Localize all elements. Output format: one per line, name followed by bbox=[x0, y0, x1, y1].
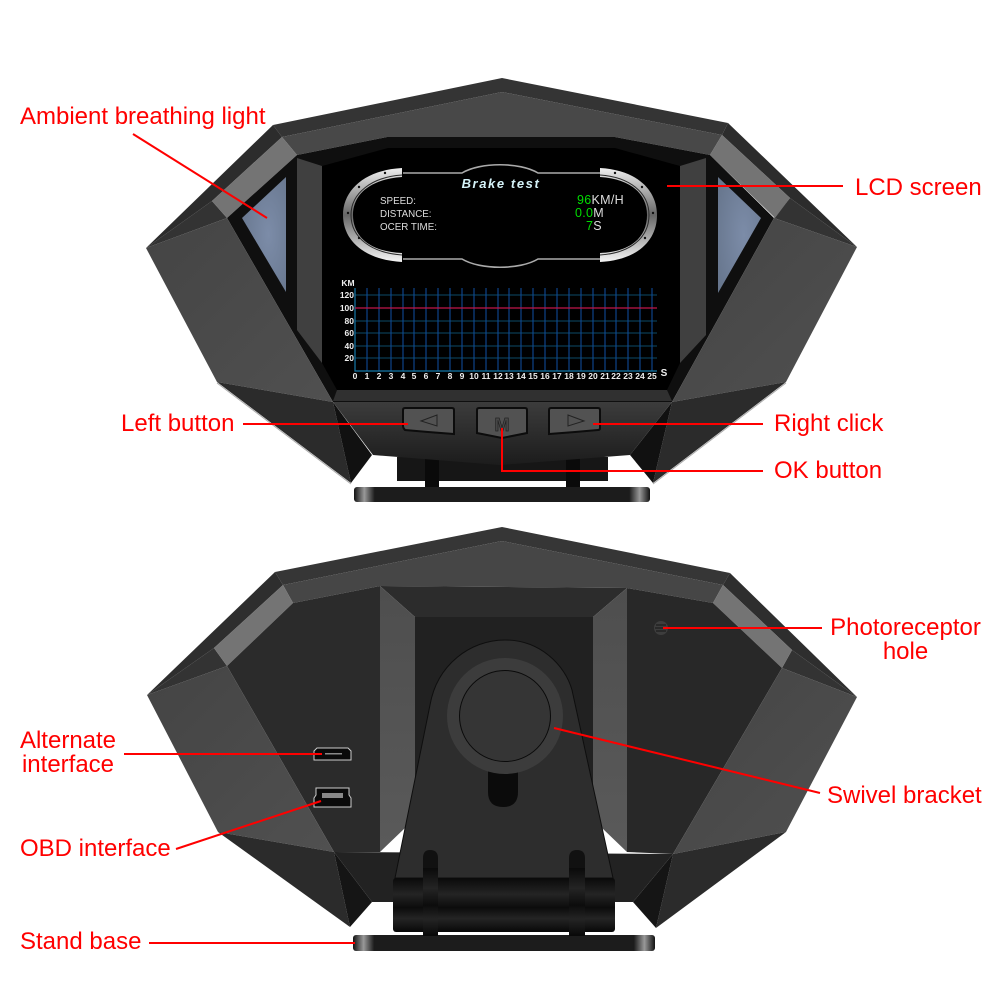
swivel ring bbox=[447, 658, 563, 774]
speed chart: 3 bbox=[389, 371, 394, 381]
ambient light left bbox=[242, 177, 286, 292]
speed chart: 5 bbox=[412, 371, 417, 381]
label: alternate interface: interface bbox=[22, 751, 114, 778]
rear view device bbox=[147, 527, 857, 951]
label: swivel bracket: Swivel bracket bbox=[827, 782, 982, 809]
speed chart: 14 bbox=[516, 371, 526, 381]
outer dark bevels bbox=[146, 123, 857, 248]
ambient light right bbox=[718, 177, 761, 293]
OK button: M bbox=[494, 415, 510, 435]
label: left button: Left button bbox=[121, 410, 234, 437]
top housing rear bbox=[275, 527, 730, 603]
speed chart: 20 bbox=[588, 371, 598, 381]
front view device bbox=[146, 78, 857, 502]
photoreceptor hole bbox=[654, 621, 668, 635]
hinge bbox=[393, 878, 615, 932]
speed chart: 16 bbox=[540, 371, 550, 381]
speed chart: 7 bbox=[436, 371, 441, 381]
label: OK button: OK button bbox=[774, 457, 882, 484]
speed chart: 23 bbox=[623, 371, 633, 381]
screen readouts: 0.0M bbox=[575, 206, 604, 220]
screen readouts: DISTANCE: bbox=[380, 209, 432, 220]
speed chart: 15 bbox=[528, 371, 538, 381]
speed chart: 80 bbox=[345, 316, 354, 326]
swivel cap bbox=[460, 670, 550, 762]
hinge strap right bbox=[569, 850, 585, 936]
button panel bbox=[333, 402, 672, 465]
right button bbox=[549, 408, 600, 434]
LCD screen bbox=[322, 148, 680, 390]
label: photoreceptor hole: Photoreceptor bbox=[830, 614, 981, 641]
speed chart: 13 bbox=[504, 371, 514, 381]
screen readouts: OCER TIME: bbox=[380, 222, 437, 233]
swivel bracket bbox=[395, 640, 613, 878]
speed chart: 17 bbox=[552, 371, 562, 381]
right side panel bbox=[672, 218, 857, 402]
label: LCD screen: LCD screen bbox=[855, 174, 982, 201]
label: photoreceptor hole: hole bbox=[883, 638, 928, 665]
speed chart: 12 bbox=[493, 371, 503, 381]
micro USB port bbox=[314, 748, 351, 760]
label: right click: Right click bbox=[774, 410, 884, 437]
speed chart: 18 bbox=[564, 371, 574, 381]
bottom screen band bbox=[333, 390, 672, 401]
speed chart: 8 bbox=[448, 371, 453, 381]
right inner panel bbox=[680, 158, 706, 363]
light bevel strips bbox=[212, 135, 790, 218]
stand base front bbox=[354, 487, 650, 502]
speed chart: 60 bbox=[345, 328, 354, 338]
label: stand base: Stand base bbox=[20, 928, 141, 955]
rear lower facets bbox=[218, 832, 786, 928]
screen readouts: 96KM/H bbox=[577, 193, 624, 207]
speed chart: 2 bbox=[377, 371, 382, 381]
speed chart: 21 bbox=[600, 371, 610, 381]
stand base rear bbox=[353, 935, 655, 951]
mini USB port bbox=[314, 788, 351, 807]
chrome oval frame bbox=[343, 165, 657, 267]
speed chart: 120 bbox=[340, 290, 354, 300]
speed chart: 24 bbox=[635, 371, 645, 381]
screen readouts bbox=[380, 193, 624, 233]
left inner panel bbox=[297, 158, 322, 363]
screen readouts: SPEED: bbox=[380, 196, 416, 207]
speed chart: 10 bbox=[469, 371, 479, 381]
speed chart: KM bbox=[341, 278, 355, 288]
top housing face bbox=[273, 78, 728, 155]
speed chart: 0 bbox=[353, 371, 358, 381]
centre recess bbox=[380, 586, 627, 852]
speed chart: 19 bbox=[576, 371, 586, 381]
label: alternate interface: Alternate bbox=[20, 727, 116, 754]
right column bevel bbox=[593, 588, 627, 852]
left column bevel bbox=[380, 586, 415, 852]
speed chart: 4 bbox=[401, 371, 406, 381]
screen readouts: 7S bbox=[586, 219, 602, 233]
left side panel bbox=[146, 218, 333, 402]
hinge strap left bbox=[423, 850, 438, 936]
rear main left bbox=[227, 586, 380, 852]
OK button bbox=[477, 408, 527, 438]
front frame bbox=[227, 137, 774, 402]
speed chart: 9 bbox=[460, 371, 465, 381]
left button bbox=[403, 408, 454, 434]
speed chart: 22 bbox=[611, 371, 621, 381]
leader lines bbox=[124, 134, 843, 943]
speed chart: 6 bbox=[424, 371, 429, 381]
speed chart: 25 bbox=[647, 371, 657, 381]
rear left side panel bbox=[147, 666, 334, 852]
speed chart: 1 bbox=[365, 371, 370, 381]
light bevel strips rear bbox=[214, 585, 792, 668]
rear main right bbox=[627, 588, 782, 854]
speed chart: S bbox=[661, 368, 668, 379]
outer dark bevels rear bbox=[147, 572, 857, 697]
screen title: Brake test bbox=[462, 176, 540, 191]
lower facets bbox=[217, 382, 786, 484]
label: ambient light: Ambient breathing light bbox=[20, 103, 266, 130]
speed chart: 100 bbox=[340, 303, 354, 313]
speed chart: 20 bbox=[345, 353, 354, 363]
speed chart bbox=[340, 278, 668, 381]
bracket slot bbox=[488, 760, 518, 807]
rear right side panel bbox=[673, 668, 857, 854]
stand legs bbox=[397, 457, 608, 488]
label: OBD interface: OBD interface bbox=[20, 835, 171, 862]
speed chart: 40 bbox=[345, 341, 354, 351]
speed chart: 11 bbox=[482, 371, 491, 381]
